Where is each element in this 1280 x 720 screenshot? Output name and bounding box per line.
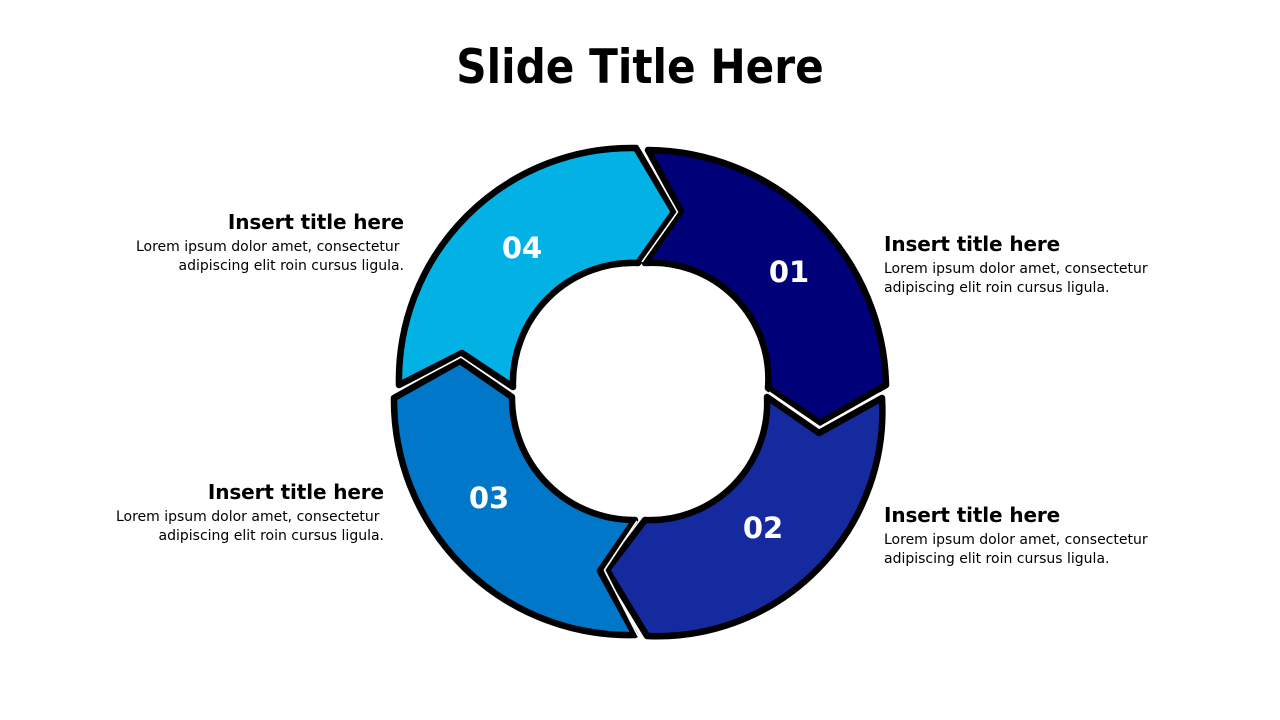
text block 03 xyxy=(116,480,384,544)
text block 02: adipiscing elit roin cursus ligula. xyxy=(884,551,1109,567)
text block 04: Insert title here xyxy=(228,210,404,234)
text block 04: adipiscing elit roin cursus ligula. xyxy=(179,258,404,274)
title: Slide Title Here xyxy=(456,40,824,95)
text block 01: Lorem ipsum dolor amet, consectetur xyxy=(884,261,1148,277)
text block 03: Lorem ipsum dolor amet, consectetur xyxy=(116,509,380,525)
text block 01: Insert title here xyxy=(884,232,1060,256)
segment 02 xyxy=(607,397,882,636)
segment 01 xyxy=(645,150,886,423)
segment 02: 02 xyxy=(743,511,783,545)
text block 04 xyxy=(136,210,404,274)
text block 01 xyxy=(884,232,1148,296)
text block 02: Lorem ipsum dolor amet, consectetur xyxy=(884,532,1148,548)
text block 03: adipiscing elit roin cursus ligula. xyxy=(159,528,384,544)
segment 03: 03 xyxy=(469,481,509,515)
text block 01: adipiscing elit roin cursus ligula. xyxy=(884,280,1109,296)
text block 04: Lorem ipsum dolor amet, consectetur xyxy=(136,239,400,255)
segment 04: 04 xyxy=(502,231,542,265)
segment 03 xyxy=(394,361,635,635)
text block 03: Insert title here xyxy=(208,480,384,504)
segment 01: 01 xyxy=(769,255,809,289)
segment 04 xyxy=(399,148,674,387)
text block 02: Insert title here xyxy=(884,503,1060,527)
text block 02 xyxy=(884,503,1148,567)
